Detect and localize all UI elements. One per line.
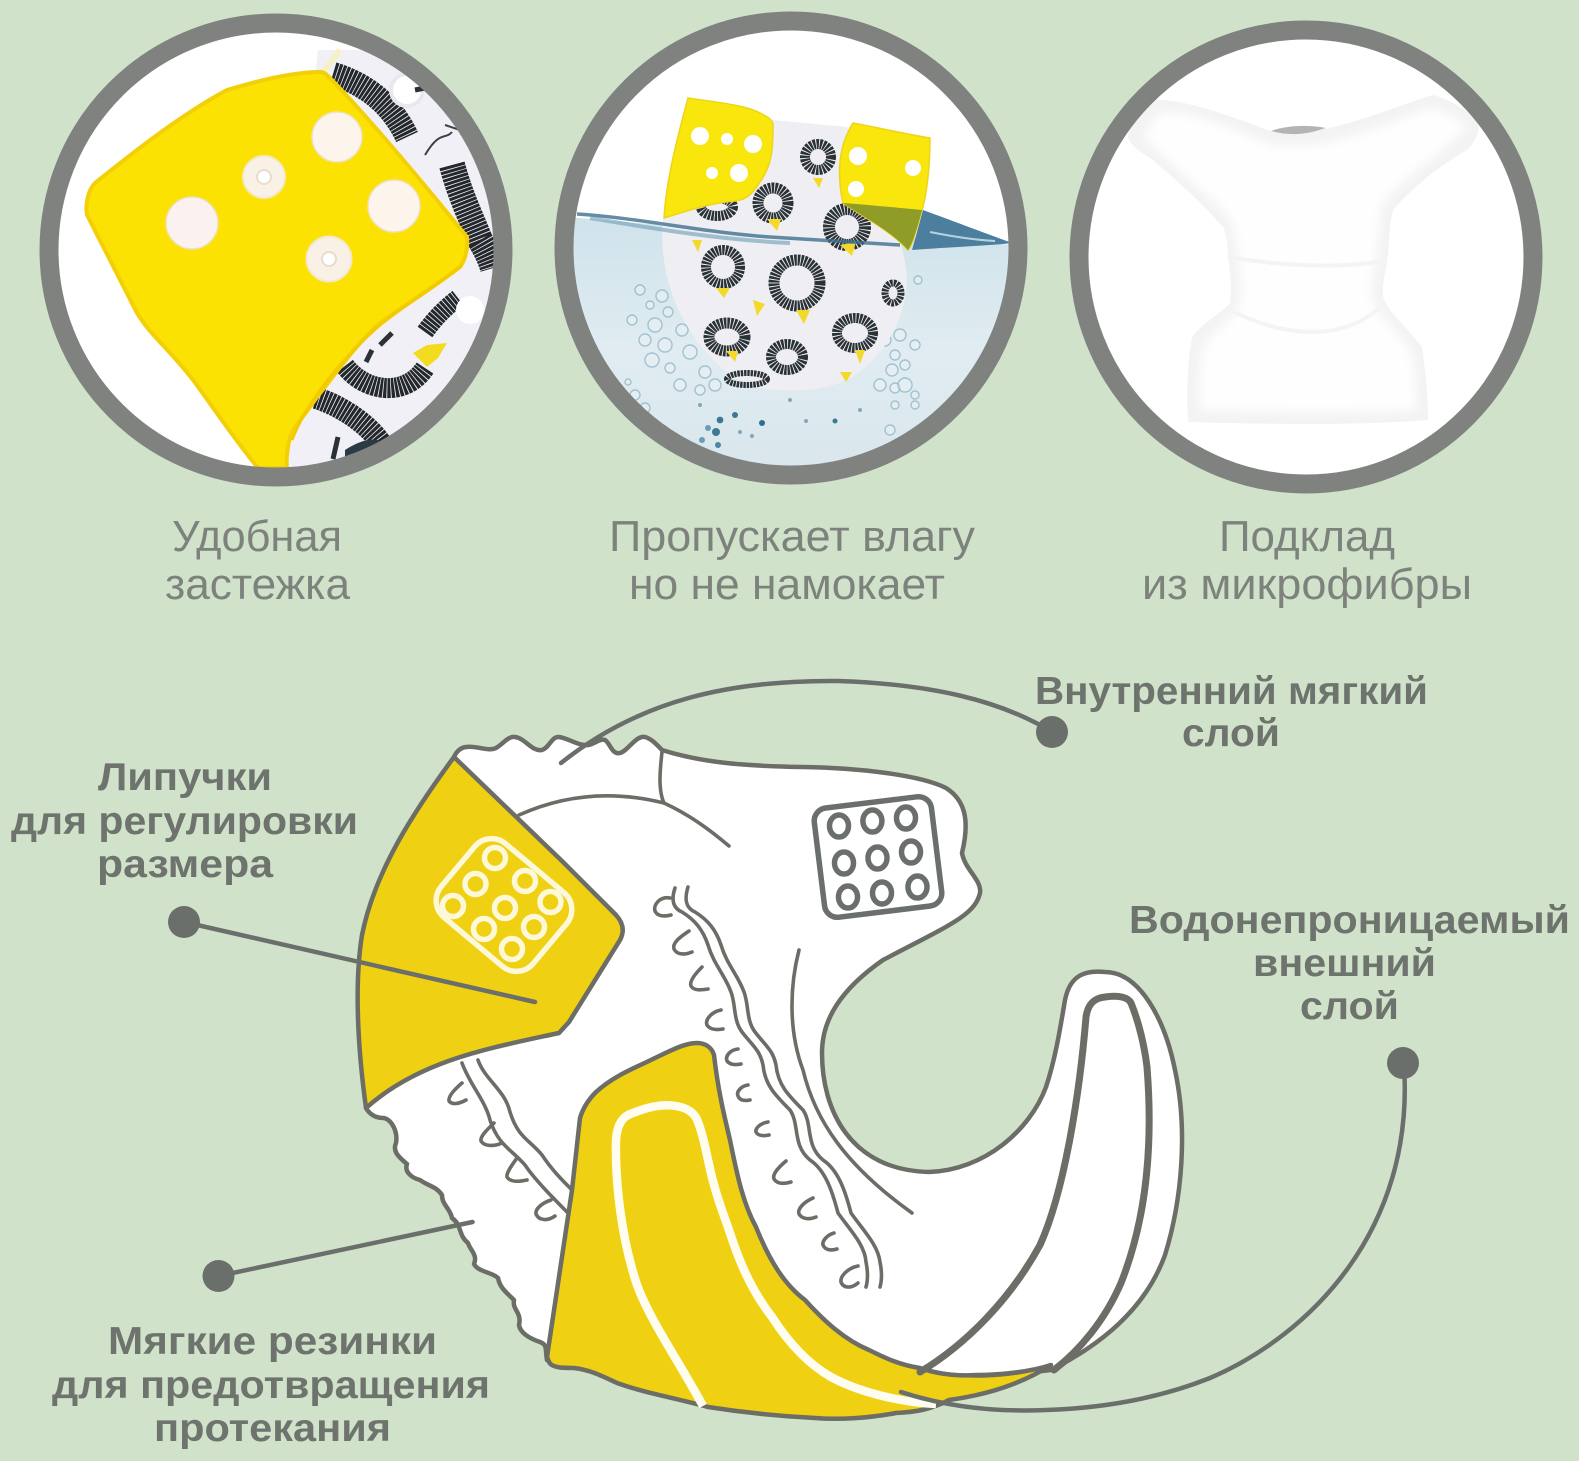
caption: lets moisture through: но не намокает <box>629 560 945 609</box>
label: soft leak guards: для предотвращения <box>52 1364 490 1407</box>
right tab <box>839 123 930 250</box>
label: inner soft layer <box>1035 670 1428 755</box>
thick inner grey outline <box>920 996 1149 1372</box>
panel: water repellent photo circle <box>555 21 1027 484</box>
inner leg gather lines <box>462 752 912 1287</box>
label: waterproof outer layer <box>1129 899 1570 1028</box>
label: size adjustment tabs <box>11 756 358 886</box>
printed diaper <box>662 120 907 391</box>
white stripe on shell <box>616 1105 936 1406</box>
caption: convenient fastener <box>165 512 351 609</box>
label: waterproof outer layer: слой <box>1300 985 1399 1028</box>
bubbles <box>625 276 922 448</box>
callout: size tabs line and dot <box>168 906 535 1002</box>
callout: soft elastic line and dot <box>202 1222 472 1292</box>
caption: lets moisture through <box>609 512 975 609</box>
label: size adjustment tabs: размера <box>97 843 273 886</box>
panel: snap fastener photo circle <box>49 23 520 480</box>
caption: convenient fastener: застежка <box>165 560 351 609</box>
callout: waterproof layer line and dot <box>901 1047 1419 1410</box>
label: soft leak guards <box>52 1320 490 1450</box>
diaper white body <box>366 737 1182 1385</box>
yellow flap <box>86 72 467 468</box>
cream snap plate on yellow tab <box>427 830 581 980</box>
diagram: diaper line drawing <box>358 737 1182 1419</box>
label: waterproof outer layer: Водонепроницаемый <box>1129 899 1570 942</box>
water surface <box>577 214 900 245</box>
caption: lets moisture through: Пропускает влагу <box>609 512 975 561</box>
label: size adjustment tabs: для регулировки <box>11 800 358 843</box>
caption: convenient fastener: Удобная <box>172 512 342 561</box>
label: inner soft layer: слой <box>1182 712 1280 755</box>
yellow outer shell <box>547 1043 1051 1419</box>
label: size adjustment tabs: Липучки <box>98 756 272 799</box>
label: soft leak guards: Мягкие резинки <box>108 1320 437 1363</box>
label: inner soft layer: Внутренний мягкий <box>1035 670 1428 713</box>
caption: microfiber lining: Подклад <box>1219 512 1395 561</box>
snap buttons <box>166 112 420 282</box>
left tab <box>664 98 773 218</box>
caption: microfiber lining <box>1142 512 1472 609</box>
yellow waist tab <box>358 757 623 1108</box>
panel: microfiber lining photo circle <box>1079 30 1533 484</box>
small stitch hooks <box>449 898 858 1287</box>
callout: inner soft layer line and dot <box>561 681 1068 763</box>
grey snap plate <box>813 795 943 919</box>
caption: microfiber lining: из микрофибры <box>1142 560 1472 609</box>
label: waterproof outer layer: внешний <box>1253 942 1436 985</box>
label: soft leak guards: протекания <box>154 1407 391 1450</box>
